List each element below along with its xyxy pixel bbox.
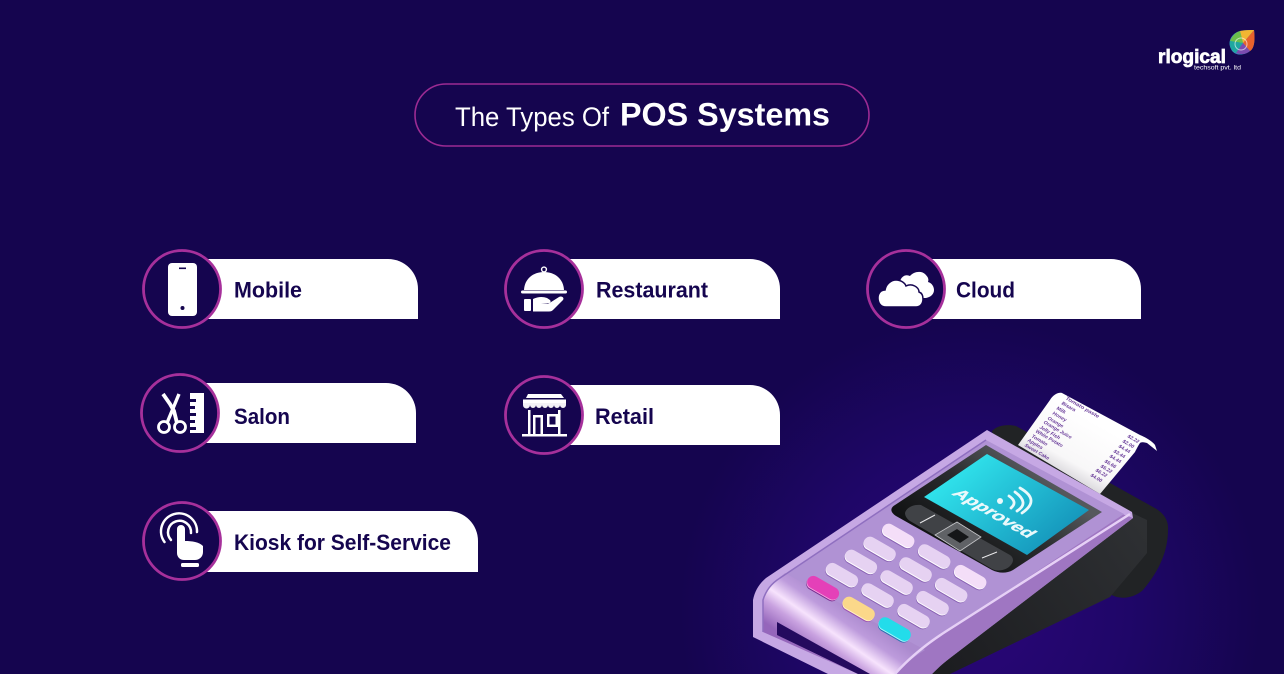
approved text: Approved (948, 486, 1041, 541)
icon: touch hand (161, 513, 203, 567)
receipt items: White Potato (1034, 429, 1064, 449)
icon ring (144, 502, 220, 580)
receipt paper (1018, 393, 1157, 494)
logo tagline: techsoft pvt. ltd (1194, 64, 1241, 72)
body right highlight (895, 514, 1130, 674)
panel: mobile (144, 250, 418, 328)
icon ring (868, 250, 944, 328)
logo mark (1230, 30, 1255, 55)
icon: clouds (878, 272, 934, 307)
logo (1158, 30, 1255, 72)
receipt prices: $2.00 (1121, 439, 1136, 450)
panel: salon (142, 374, 416, 452)
label: Retail (595, 404, 654, 429)
contactless icon (997, 488, 1031, 513)
icon: phone (168, 263, 197, 316)
card slot (777, 622, 870, 674)
rear roller (992, 425, 1168, 598)
receipt prices: $5.22 (1099, 464, 1114, 475)
receipt items: Milk (1055, 406, 1067, 415)
label pill (188, 383, 416, 443)
dark side body (925, 512, 1147, 674)
label: Restaurant (596, 278, 709, 302)
screen bezel (891, 445, 1102, 573)
label pill (914, 259, 1141, 319)
label: Salon (234, 404, 290, 429)
panel: cloud (868, 250, 1141, 328)
logo name: rlogical (1158, 47, 1226, 68)
receipt items: Bisara (1060, 401, 1077, 413)
keypad (804, 521, 989, 645)
receipt prices: $4.00 (1089, 473, 1104, 484)
receipt prices: $4.44 (1117, 444, 1132, 455)
receipt items: Sweet Cake (1023, 443, 1051, 462)
icon: cloche and hand (521, 267, 567, 312)
receipt items: Apples (1026, 438, 1044, 451)
label: Cloud (956, 278, 1015, 302)
icon ring (506, 376, 582, 454)
lower side strip (895, 514, 1133, 674)
panel: kiosk (144, 502, 478, 580)
title pill (415, 84, 869, 146)
receipt items: Orange (1046, 416, 1065, 429)
lilac body shell (753, 430, 1133, 674)
navigation buttons (905, 505, 1013, 570)
receipt items (1023, 396, 1101, 462)
screen (924, 454, 1089, 555)
receipt prices: $6.22 (1094, 468, 1109, 479)
front face (763, 573, 925, 674)
icon: storefront (522, 394, 567, 436)
receipt prices: $5.66 (1103, 459, 1118, 470)
device glow (660, 310, 1284, 674)
icon ring (144, 250, 220, 328)
receipt items: Orange Juice (1042, 420, 1073, 440)
body inner groove (763, 440, 986, 632)
label: Kiosk for Self-Service (234, 530, 451, 555)
receipt prices: $4.44 (1108, 454, 1123, 465)
label pill (190, 511, 478, 572)
receipt items: Honey (1051, 411, 1068, 423)
label pill (552, 385, 780, 445)
title light text: The Types Of (455, 102, 609, 132)
receipt items: Tomato (1030, 434, 1049, 447)
icon: scissors and ruler (158, 393, 204, 433)
panel: retail (506, 376, 780, 454)
top surface (763, 440, 1124, 674)
label: Mobile (234, 278, 302, 302)
panel: restaurant (506, 250, 780, 328)
receipt items: Jelly Fish (1038, 425, 1061, 441)
POS terminal illustration (753, 393, 1168, 674)
receipt prices (1089, 434, 1141, 484)
icon ring (506, 250, 582, 328)
title (415, 84, 869, 146)
receipt prices: $3.44 (1112, 449, 1127, 460)
receipt prices: $2.22 (1126, 434, 1141, 445)
label pill (552, 259, 780, 319)
label pill (190, 259, 418, 319)
icon ring (142, 374, 218, 452)
receipt items: Tomato paste (1064, 396, 1101, 420)
title bold text: POS Systems (620, 96, 830, 132)
